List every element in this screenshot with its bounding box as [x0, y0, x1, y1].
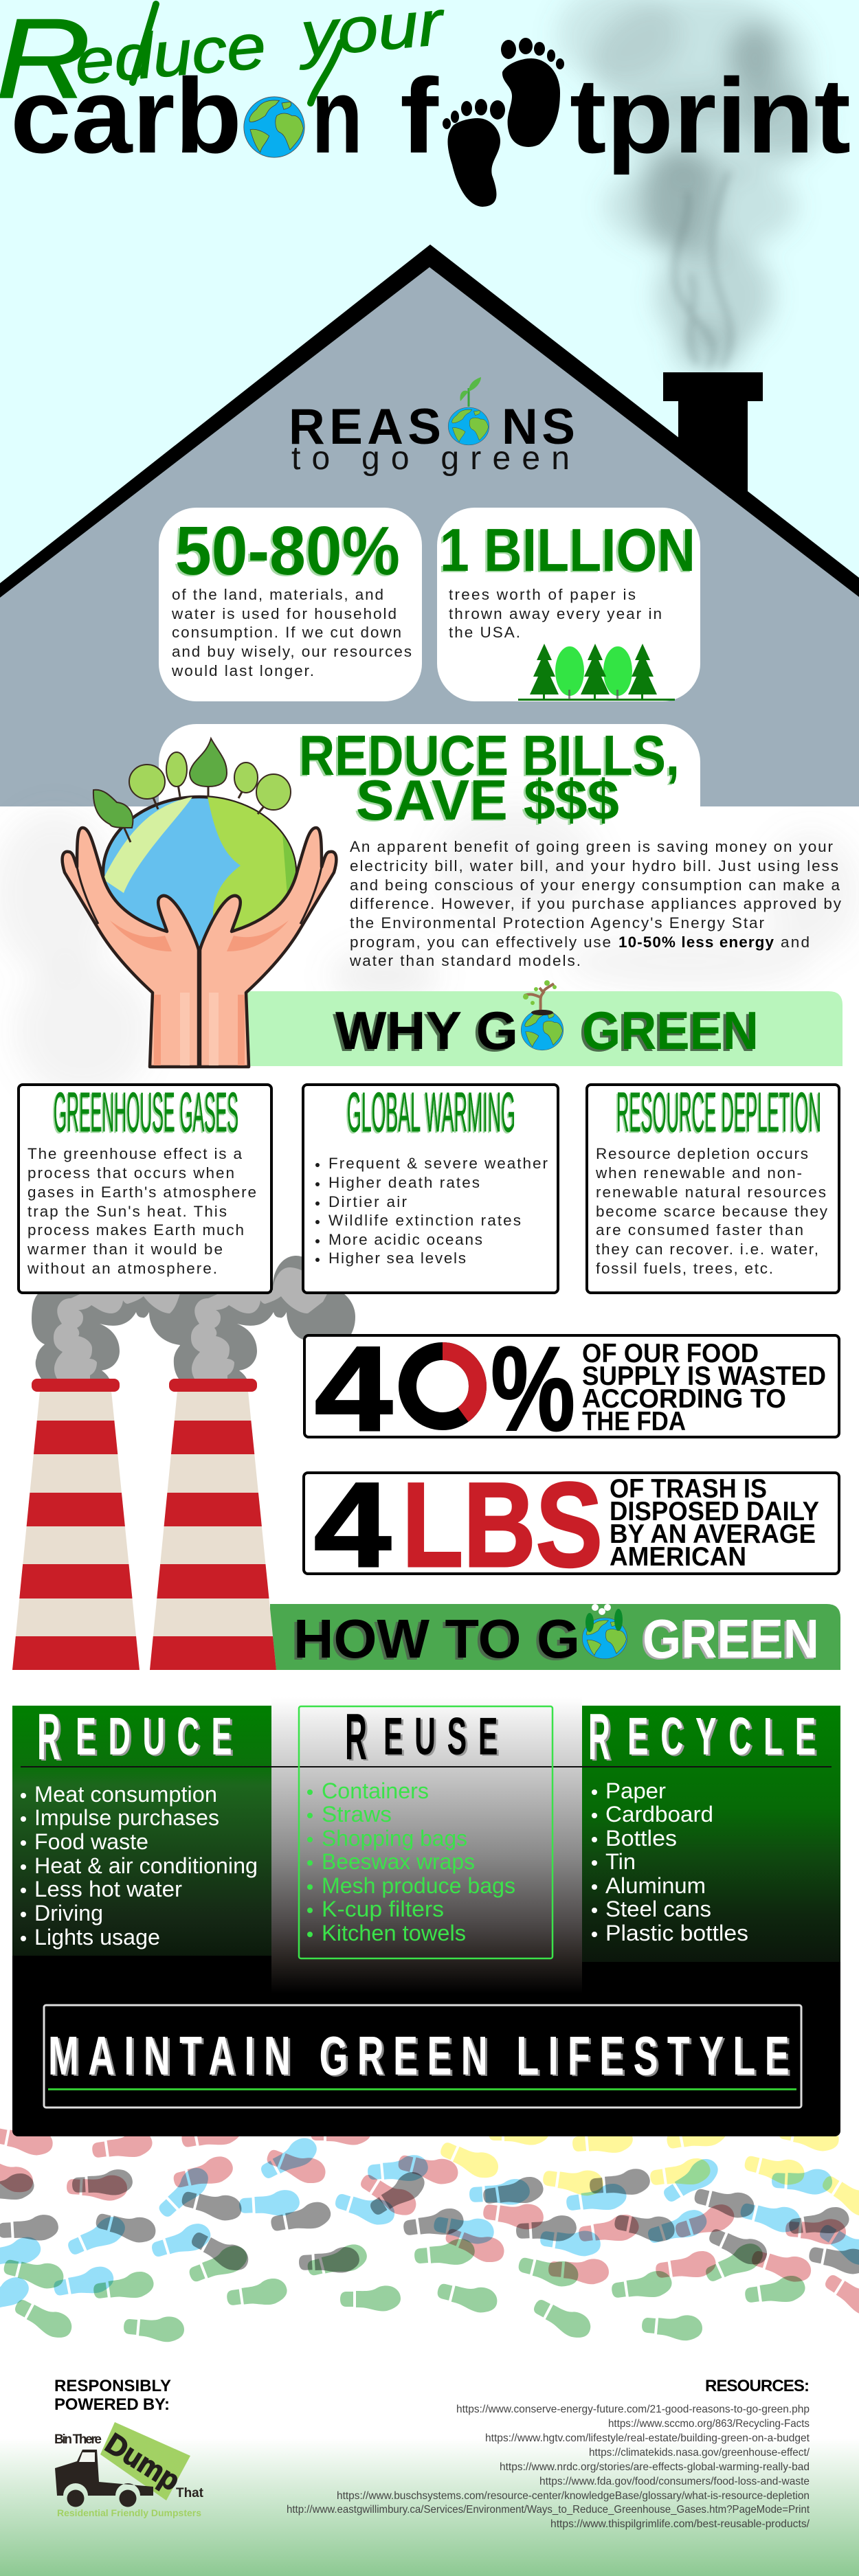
- callout: maintain green lifestyle: [44, 2005, 801, 2108]
- panel: greenhouse gases: process makes Earth much: [27, 1221, 244, 1239]
- right hand: [200, 828, 336, 1067]
- panel: resource depletion: Resource depletion occurs: [596, 1145, 808, 1162]
- body text: saving money: An apparent benefit of going green is saving money on your: [350, 838, 833, 855]
- column: reuse: Mesh produce bags: [322, 1873, 515, 1898]
- icon: footprints as letter o: [443, 38, 564, 207]
- column: reuse: K-cup filters: [322, 1897, 444, 1921]
- panel: 50-80% stat: of the land, materials, and: [172, 586, 383, 603]
- panel: global warming: Higher death rates: [328, 1174, 480, 1191]
- heading: how to go green: [293, 1604, 819, 1669]
- panel: resource depletion: become scarce because they: [596, 1203, 828, 1220]
- resources list: [287, 2377, 810, 2530]
- logo: bin there dump that: [54, 2422, 204, 2518]
- body text: saving money: water than standard models.: [349, 952, 581, 969]
- title: carbon footprint: tprint: [570, 56, 851, 175]
- column: recycle: R: [588, 1700, 610, 1774]
- icon: globe with sprout: [448, 377, 489, 445]
- panel: global warming: Wildlife extinction rates: [328, 1212, 521, 1229]
- panel: resource depletion: [587, 1081, 839, 1293]
- resources list: https://www.buschsystems.com/resource-center/knowledgeBase/glossary/what-is-resource-depletion: [337, 2490, 810, 2502]
- column: recycle: Plastic bottles: [605, 1921, 748, 1945]
- column: reduce: Food waste: [34, 1829, 148, 1854]
- callout: 4 lbs of trash: 4: [314, 1458, 391, 1592]
- callout: 4 lbs of trash: BY AN AVERAGE: [610, 1519, 816, 1549]
- panel: 1 billion stat: trees worth of paper is: [449, 586, 636, 603]
- panel: 1 billion stat: thrown away every year in: [449, 605, 662, 622]
- column: reduce: Less hot water: [34, 1877, 182, 1901]
- panel: greenhouse gases: The greenhouse effect is a: [27, 1145, 242, 1162]
- text: GLOBAL WARMING: [347, 1081, 515, 1144]
- resources list: https://www.hgtv.com/lifestyle/real-estate/building-green-on-a-budget: [485, 2432, 810, 2444]
- heading: reduce bills save $$$: SAVE $$$: [356, 768, 619, 832]
- panel: global warming: More acidic oceans: [328, 1231, 482, 1248]
- resources list: https://www.conserve-energy-future.com/21-good-reasons-to-go-green.php: [456, 2404, 810, 2415]
- panel: 50-80% stat: water is used for household: [171, 605, 397, 622]
- text: GREENHOUSE GASES: [54, 1081, 238, 1144]
- heading: reasons to go green: NS: [502, 399, 575, 455]
- panel: 1 billion stat: the USA.: [449, 624, 520, 641]
- column: recycle: Cardboard: [605, 1802, 713, 1827]
- panel: reduce bills card: [0, 724, 859, 1088]
- panel: 1 billion stat: 1 BILLION: [440, 516, 695, 584]
- house: roof and wall: [0, 245, 859, 806]
- heading: why go green: GREEN: [582, 1000, 759, 1061]
- panel: resource depletion: renewable natural resources: [596, 1184, 826, 1201]
- icon: globe as letter o: [244, 97, 304, 157]
- heading: reasons to go green: [289, 377, 575, 477]
- callout: 40 percent food wasted: THE FDA: [582, 1407, 686, 1436]
- resources list: http://www.eastgwillimbury.ca/Services/Environment/Ways_to_Reduce_Greenhouse_Gases.htm?PageMode=Print: [287, 2504, 810, 2516]
- callout: 40 percent food wasted: 4: [315, 1322, 392, 1456]
- column: reuse: [299, 1700, 553, 1958]
- body text: saving money: electricity bill, water bill, and your hydro bill. Just using less: [350, 857, 838, 874]
- title: carbon footprint: f: [400, 56, 438, 175]
- panel: greenhouse gases: trap the Sun's heat. This: [27, 1203, 227, 1220]
- resources list: https://climatekids.nasa.gov/greenhouse-effect/: [589, 2447, 810, 2459]
- banner: how to go green background: [270, 1604, 840, 1670]
- body text: saving money: the Environmental Protection Agency's Energy Star: [350, 914, 764, 931]
- panel: greenhouse gases: warmer than it would be: [27, 1241, 223, 1258]
- callout: 40 percent food wasted: OF OUR FOOD: [582, 1339, 759, 1368]
- column: recycle: Tin: [605, 1849, 636, 1874]
- column: recycle: Paper: [605, 1778, 666, 1803]
- body text: saving money: difference. However, if you purchase appliances approved by: [350, 895, 842, 912]
- body text: saving money: and: [781, 934, 810, 951]
- illustration: hands holding globe: [63, 738, 336, 1067]
- panel: greenhouse gases: gases in Earth's atmosphere: [27, 1184, 256, 1201]
- faint smoke on white section: [0, 804, 859, 1099]
- panel: resource depletion: they can recover. i.e. water,: [596, 1241, 818, 1258]
- title: carbon footprint: n: [311, 56, 363, 175]
- column: reduce: [21, 1700, 258, 1950]
- column: reuse: R: [345, 1700, 367, 1774]
- resources list: RESOURCES:: [705, 2377, 810, 2395]
- callout: 4 lbs of trash: LBS: [402, 1458, 603, 1592]
- panel: global warming: Frequent & severe weather: [328, 1155, 548, 1172]
- column: recycle: Bottles: [605, 1826, 677, 1851]
- callout: 40 percent food wasted: SUPPLY IS WASTED: [582, 1362, 826, 1391]
- heading: why go green: [335, 980, 759, 1061]
- icon: globe with trees: [582, 1604, 627, 1659]
- sponsor heading: [54, 2377, 171, 2414]
- callout: 4 lbs of trash: AMERICAN: [610, 1542, 746, 1572]
- column: reuse: Kitchen towels: [322, 1921, 466, 1945]
- panel: greenhouse gases: process that occurs when: [27, 1164, 234, 1182]
- callout: 4 lbs of trash: DISPOSED DAILY: [610, 1497, 819, 1526]
- panel: global warming: [303, 1081, 558, 1293]
- panel: global warming: Dirtier air: [328, 1193, 407, 1210]
- callout: 4 lbs of trash: [304, 1458, 839, 1592]
- logo: bin there dump that: Dump: [100, 2427, 186, 2497]
- tree crown group on globe: [93, 738, 291, 842]
- panel: resource depletion: fossil fuels, trees, etc.: [596, 1260, 773, 1277]
- column: reduce: Meat consumption: [34, 1782, 217, 1807]
- resources list: https://www.fda.gov/food/consumers/food-loss-and-waste: [539, 2476, 810, 2487]
- column: reuse: Containers: [322, 1778, 429, 1803]
- heading: reduce bills save $$$: REDUCE BILLS,: [299, 723, 680, 787]
- column: reuse: EUSE: [383, 1707, 509, 1766]
- panel: global warming: Higher sea levels: [328, 1250, 466, 1267]
- column: recycle: [588, 1700, 828, 1945]
- callout: 40 percent food wasted: ACCORDING TO: [582, 1384, 786, 1414]
- title: carbon footprint: [10, 56, 851, 175]
- footer gradient: [0, 2439, 859, 2576]
- column: reduce: EDUCE: [76, 1707, 244, 1766]
- illustration: striped smokestacks: [0, 1379, 289, 1670]
- panel: 50-80% stat: would last longer.: [171, 662, 314, 679]
- title script: Reduce your: [0, 0, 448, 122]
- column: reuse: Shopping bags: [322, 1826, 467, 1851]
- background: light cyan sky: [0, 0, 859, 806]
- panel: 1 billion stat: [437, 508, 700, 701]
- column: recycle: Aluminum: [605, 1873, 706, 1898]
- panel: greenhouse gases: [19, 1081, 271, 1293]
- body text: saving money: [349, 838, 842, 969]
- body text: saving money: program, you can effectively use: [350, 934, 611, 951]
- heading: why go green: WHY G: [335, 1000, 518, 1061]
- heading: how to go green: HOW TO G: [293, 1608, 580, 1669]
- panel: 50-80% stat: [159, 508, 422, 701]
- sponsor heading: POWERED BY:: [54, 2395, 170, 2414]
- banner: why go green background: [247, 991, 843, 1066]
- column: reuse: Straws: [322, 1802, 392, 1827]
- icon: globe with tree: [521, 980, 564, 1050]
- heading: reasons to go green: to go green: [291, 440, 570, 477]
- title: carbon footprint: carb: [10, 56, 242, 175]
- house: chimney: [663, 372, 763, 498]
- panel: 50-80% stat: consumption. If we cut down: [172, 624, 401, 641]
- panel: 50-80% stat: and buy wisely, our resources: [172, 643, 412, 660]
- panel: 50-80% stat: 50-80%: [175, 512, 400, 589]
- heading: how to go green: GREEN: [643, 1608, 819, 1669]
- logo: bin there dump that: Residential Friendly Dumpsters: [57, 2507, 201, 2518]
- left hand: [63, 828, 199, 1067]
- logo: bin there dump that: Bin There: [54, 2432, 102, 2447]
- heading: reasons to go green: REAS: [289, 399, 441, 455]
- resources list: https://www.sccmo.org/863/Recycling-Facts: [608, 2418, 810, 2430]
- column: reduce: Heat & air conditioning: [34, 1853, 258, 1878]
- callout: 4 lbs of trash: OF TRASH IS: [610, 1474, 767, 1504]
- column: reduce: R: [37, 1700, 60, 1774]
- panel: resource depletion: are consumed faster than: [596, 1221, 803, 1239]
- chart: donut as zero: [408, 1351, 478, 1421]
- heading: reduce bills save $$$: [299, 723, 680, 832]
- panel: resource depletion: when renewable and non-: [595, 1164, 802, 1182]
- illustration: factory smoke: [32, 1256, 355, 1379]
- column: reduce: Impulse purchases: [34, 1805, 219, 1830]
- column: reuse: Beeswax wraps: [322, 1849, 475, 1874]
- smoke plume above chimney: [557, 0, 825, 374]
- footprints pattern: [0, 2116, 859, 2344]
- column: reduce: Driving: [34, 1901, 103, 1925]
- resources list: https://www.nrdc.org/stories/are-effects-global-warming-really-bad: [500, 2461, 810, 2473]
- callout: 40 percent food wasted: [304, 1322, 839, 1456]
- body text: saving money: 10-50% less energy: [618, 934, 774, 951]
- sponsor heading: RESPONSIBLY: [54, 2377, 171, 2395]
- column: recycle: Steel cans: [605, 1897, 711, 1921]
- callout: 40 percent food wasted: %: [491, 1322, 575, 1456]
- panel: how to go green black backdrop: [12, 1697, 840, 2136]
- resources list: https://www.thispilgrimlife.com/best-reusable-products/: [550, 2518, 810, 2530]
- body text: saving money: and being conscious of your energy consumption can make a: [350, 877, 840, 894]
- icon: row of trees: [518, 644, 675, 701]
- column: reduce: Lights usage: [34, 1925, 160, 1950]
- panel: greenhouse gases: without an atmosphere.: [27, 1260, 217, 1277]
- title script: Reduce your: educe: [72, 11, 269, 98]
- logo: bin there dump that: That: [176, 2486, 204, 2500]
